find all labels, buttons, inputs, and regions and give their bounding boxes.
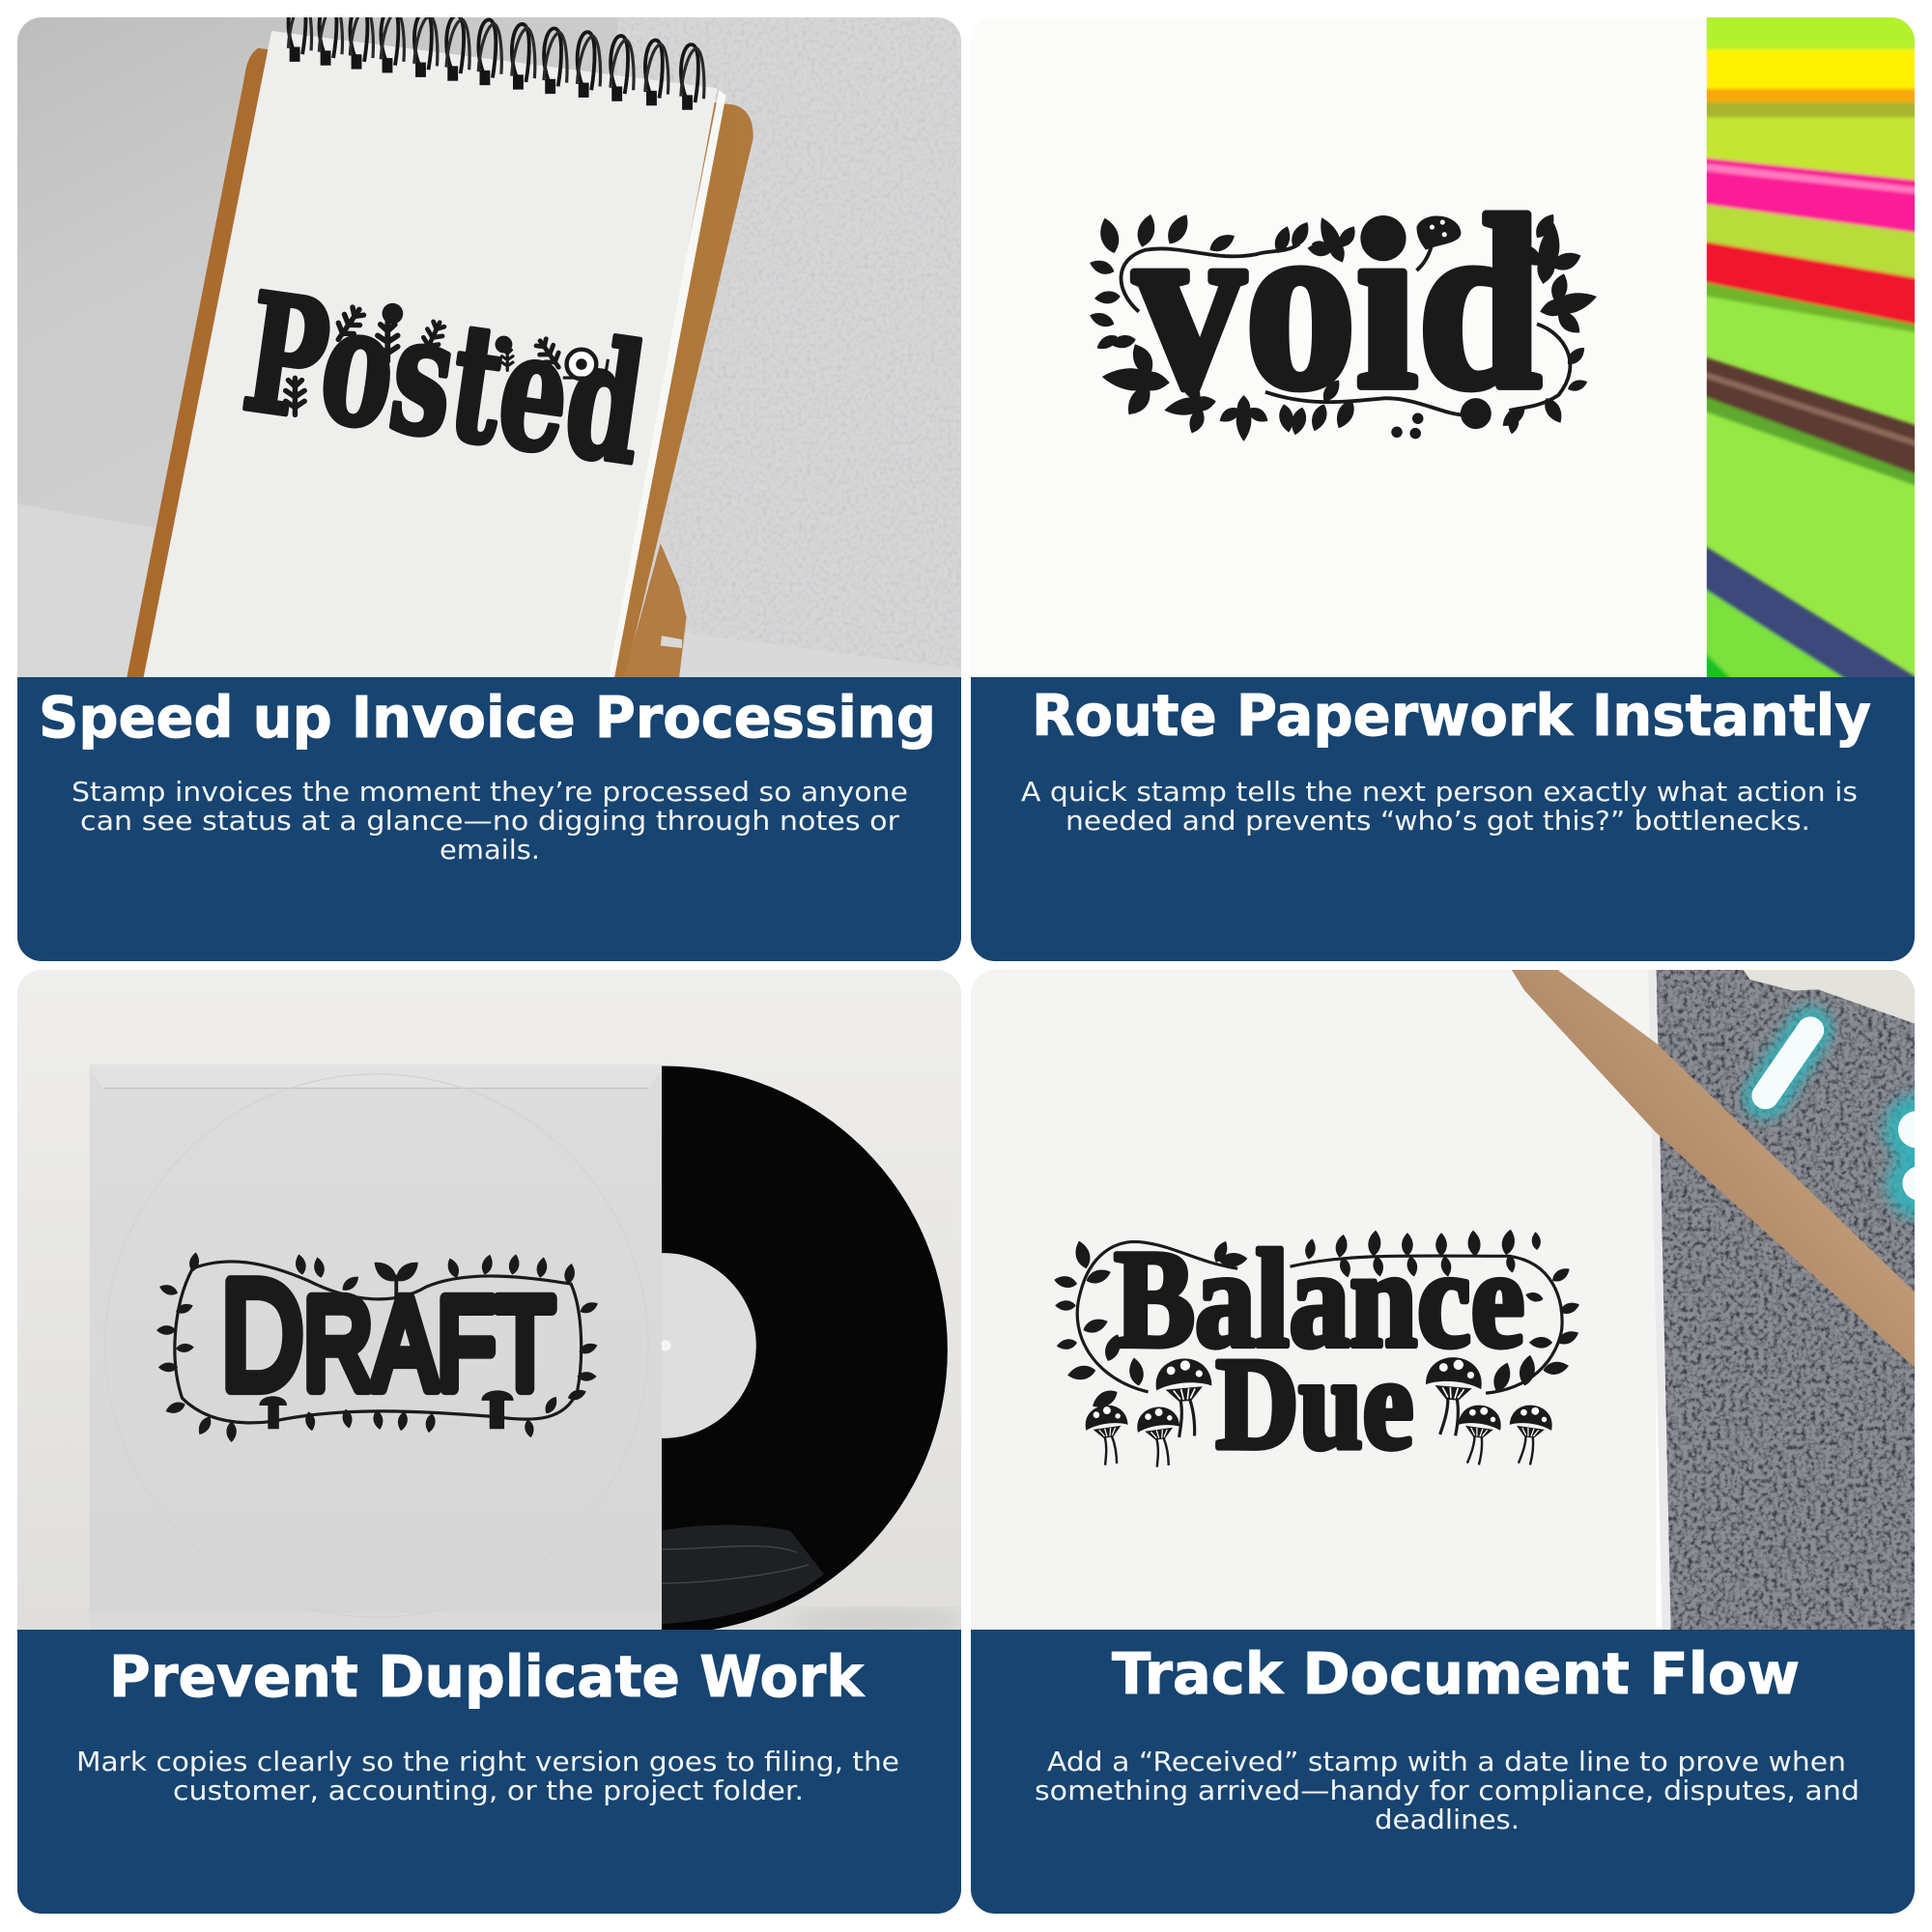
body text: can see status at a glance—no digging through notes or	[80, 805, 900, 837]
heading: Speed up Invoice Processing	[39, 684, 936, 751]
body text: Stamp invoices the moment they’re processed so anyone	[71, 776, 908, 808]
stamp: Posted	[242, 288, 643, 466]
body text: needed and prevents “who’s got this?” bottlenecks.	[1065, 805, 1810, 837]
caption panel	[971, 677, 1915, 961]
body text: something arrived—handy for compliance, disputes, and	[1035, 1775, 1860, 1806]
body text: emails.	[440, 834, 540, 866]
body text: A quick stamp tells the next person exactly what action is	[1021, 776, 1858, 808]
caption panel	[17, 1630, 961, 1914]
panel: Route Paperwork Instantly	[966, 13, 1929, 961]
body text: deadlines.	[1375, 1804, 1520, 1835]
panel: Track Document Flow	[966, 966, 1932, 1914]
stamp: DRAFT: DRAFT	[221, 1248, 554, 1421]
stamp: Posted: Posted	[234, 258, 655, 501]
body text	[1021, 776, 1858, 837]
caption panel	[971, 1630, 1915, 1914]
photo: white paper beside colored pencils	[1090, 17, 1915, 677]
photo: paper, pencil and granite surface	[966, 966, 1932, 1639]
body text: customer, accounting, or the project folder.	[173, 1775, 804, 1806]
panel: Prevent Duplicate Work	[13, 966, 969, 1914]
stamp: Balance Due: Due	[1216, 1331, 1413, 1476]
body text	[76, 1746, 899, 1806]
stamp: Balance Due	[1053, 1222, 1581, 1476]
photo: vinyl record in sleeve	[13, 966, 969, 1639]
stamp: Balance Due: Balance	[1114, 1222, 1524, 1377]
body text: Add a “Received” stamp with a date line to prove when	[1047, 1746, 1846, 1777]
caption panel	[17, 677, 961, 961]
heading: Route Paperwork Instantly	[1032, 682, 1871, 749]
heading: Track Document Flow	[1112, 1640, 1800, 1707]
body text: Mark copies clearly so the right version goes to filing, the	[76, 1746, 899, 1777]
heading: Prevent Duplicate Work	[109, 1643, 866, 1710]
body text	[73, 781, 906, 860]
panel: Speed up Invoice Processing	[13, 0, 976, 961]
body text	[1036, 1750, 1857, 1830]
stamp: void: void	[1134, 166, 1542, 440]
photo: spiral notepad on wooden stand	[13, 0, 976, 685]
